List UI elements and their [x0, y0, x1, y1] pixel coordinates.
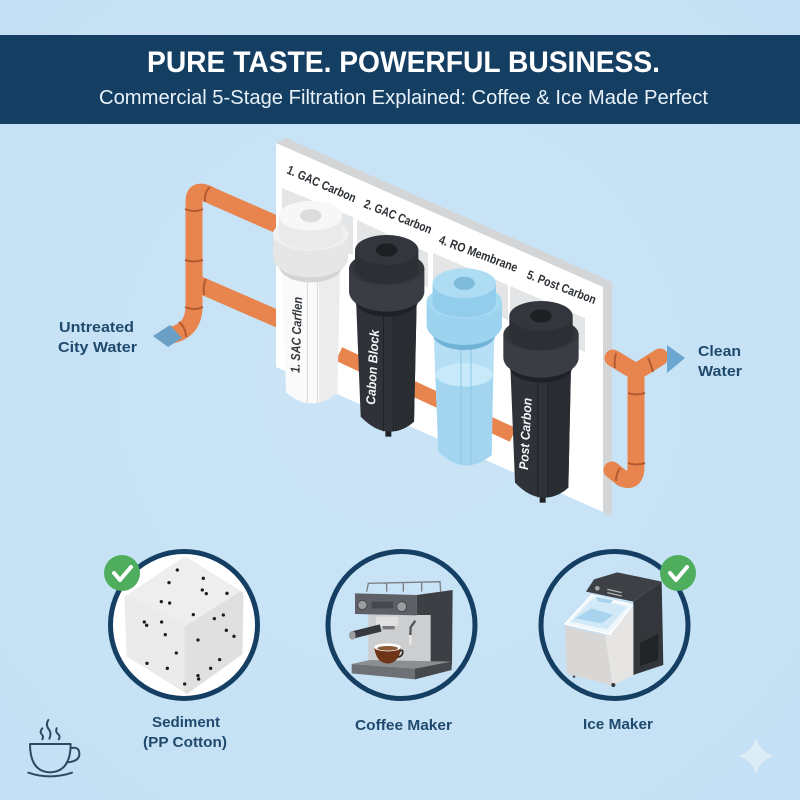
inlet label: Untreated [59, 319, 134, 336]
panel labels: 1. GAC Carbon [285, 163, 358, 205]
ice maker circle [541, 552, 688, 698]
outlet pipe [612, 345, 685, 481]
filter 1 label: 1. SAC Carflen [288, 297, 305, 373]
sediment label: (PP Cotton) [143, 734, 227, 751]
mounting panel [276, 138, 612, 516]
ice maker label: Ice Maker [583, 716, 653, 733]
ice machine [565, 572, 663, 687]
outlet label [698, 343, 742, 380]
inlet arrow [153, 325, 182, 347]
title: PURE TASTE. POWERFUL BUSINESS. [147, 46, 660, 79]
filter 1: white [273, 201, 348, 403]
sediment label [143, 714, 227, 751]
sediment cube [127, 559, 241, 691]
outlet arrow [667, 345, 685, 373]
filter 4 label: Post Carbon [516, 397, 535, 470]
outlet label: Clean [698, 343, 741, 360]
subtitle: Commercial 5-Stage Filtration Explained: Coffee & Ice Made Perfect [99, 87, 708, 109]
panel labels: 5. Post Carbon [525, 268, 598, 307]
sediment circle [110, 552, 258, 698]
filter 2 label: Cabon Block [363, 329, 382, 405]
mounting plates [282, 188, 585, 352]
inlet pipe [153, 187, 285, 347]
inlet label [58, 319, 137, 356]
filter 3: RO membrane [427, 268, 502, 465]
coffee maker label: Coffee Maker [355, 717, 452, 734]
filter 4: post carbon [503, 301, 579, 503]
coffee maker circle [328, 552, 475, 698]
icon: coffee cup [28, 720, 79, 776]
check badge: sediment [104, 555, 140, 591]
sediment label: Sediment [152, 714, 220, 731]
inlet label: City Water [58, 339, 137, 356]
filter 2: carbon block [349, 235, 424, 437]
panel labels [285, 163, 598, 307]
panel labels: 4. RO Membrane [437, 233, 520, 275]
outlet label: Water [698, 363, 742, 380]
icon: sparkle [738, 738, 774, 774]
coffee machine [349, 582, 453, 679]
panel labels: 2. GAC Carbon [362, 197, 434, 237]
internal pipe [339, 354, 513, 435]
header banner [0, 35, 800, 124]
check badge: ice maker [660, 555, 696, 591]
